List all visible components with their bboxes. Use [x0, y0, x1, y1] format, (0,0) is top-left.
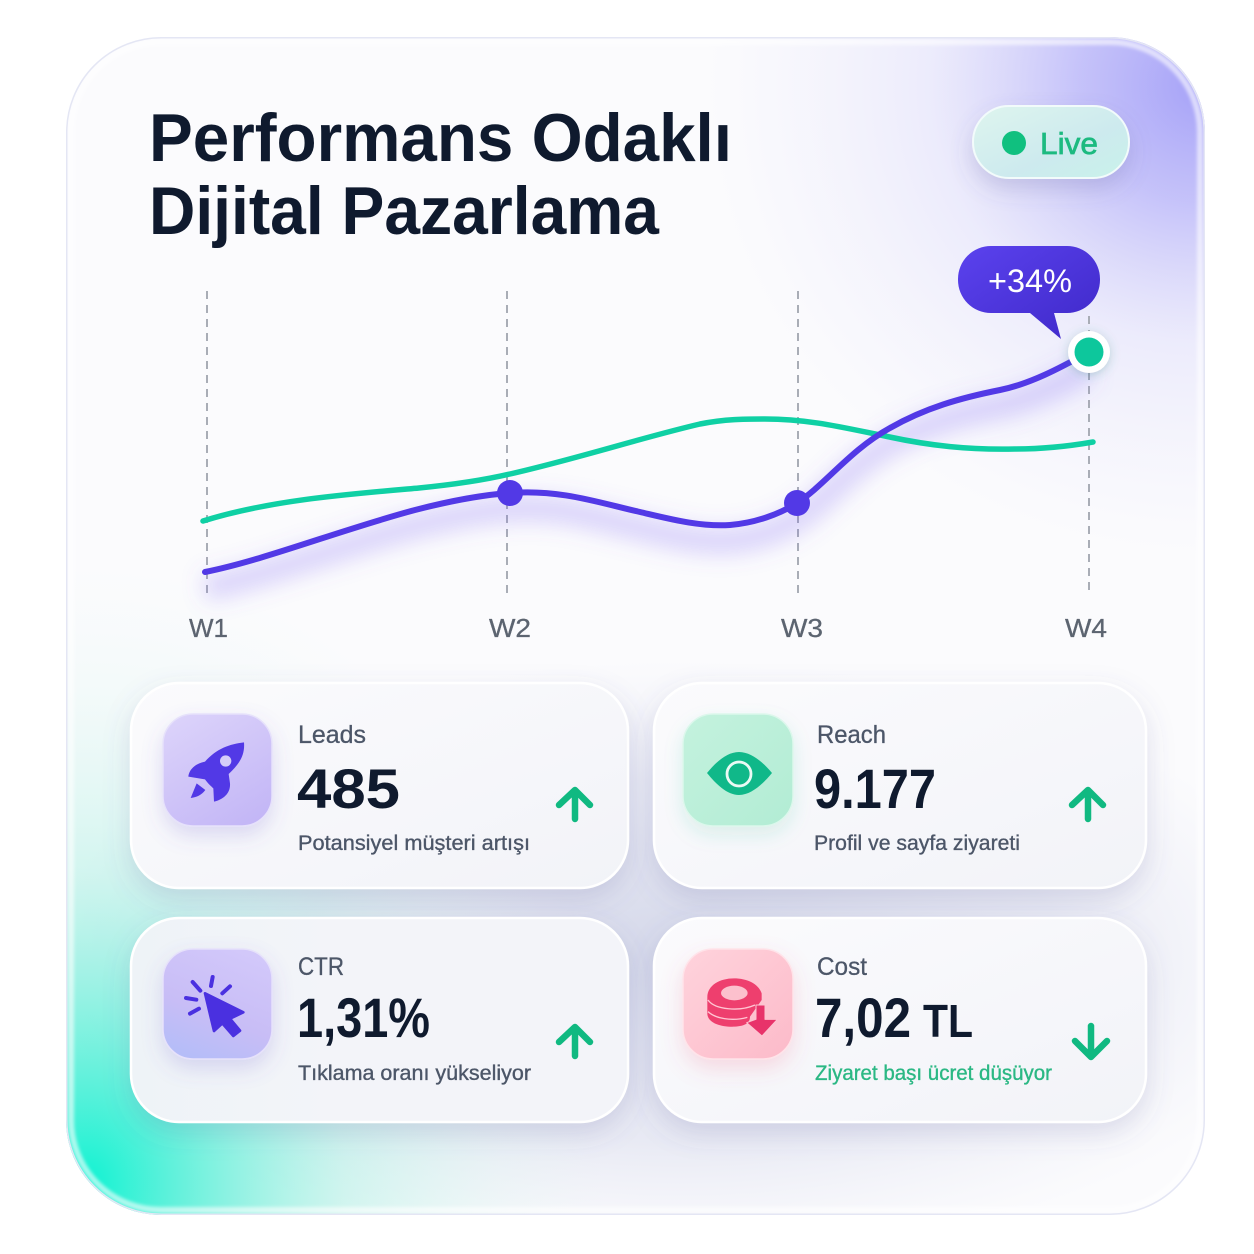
arrow: down — [1075, 1026, 1107, 1057]
arrow: up — [559, 1027, 590, 1056]
live badge — [973, 106, 1129, 178]
live badge: Live — [1040, 126, 1098, 161]
line chart — [189, 291, 1110, 643]
point W2 — [497, 480, 523, 506]
card: Leads: 485 — [297, 757, 400, 820]
card: Leads: Leads — [298, 721, 366, 749]
card: Reach: Profil ve sayfa ziyareti — [814, 832, 1020, 855]
card: Reach — [654, 683, 1146, 888]
week labels: W4 — [1065, 613, 1107, 643]
card: Reach: 9.177 — [814, 757, 936, 820]
card: CTR: Tıklama oranı yükseliyor — [298, 1062, 531, 1085]
card: Cost — [654, 918, 1146, 1122]
title: Performans Odaklı — [149, 100, 732, 176]
callout: +34%: +34% — [988, 263, 1072, 299]
purple line glow — [205, 368, 1089, 588]
week labels: W2 — [489, 613, 531, 643]
title: Dijital Pazarlama — [149, 173, 660, 249]
point W3 — [784, 490, 810, 516]
icon: eye — [683, 714, 793, 826]
icon: coins with down arrow — [683, 949, 793, 1059]
arrow: up — [1072, 790, 1103, 819]
card: CTR: CTR — [298, 953, 344, 981]
week labels: W3 — [781, 613, 823, 643]
card: CTR — [131, 918, 628, 1122]
card: Reach: Reach — [817, 721, 886, 749]
arrow: up — [559, 790, 590, 819]
card: Cost: 7,02 — [815, 986, 911, 1049]
callout: +34% — [958, 246, 1100, 339]
series: green line — [203, 419, 1093, 521]
week labels — [189, 613, 1107, 643]
week grid lines — [207, 291, 1089, 595]
card: Cost: Cost — [817, 953, 867, 981]
card: Leads: Potansiyel müşteri artışı — [298, 832, 530, 855]
week labels: W1 — [189, 613, 228, 643]
card: CTR: 1,31% — [297, 986, 430, 1049]
point W4 — [1068, 331, 1110, 373]
card: Cost: TL — [923, 995, 973, 1047]
icon: rocket — [163, 714, 272, 826]
card: Cost: Ziyaret başı ücret düşüyor — [815, 1062, 1052, 1085]
card: Leads — [131, 683, 628, 888]
series: purple line — [205, 352, 1089, 572]
icon: cursor click — [163, 949, 272, 1059]
title — [149, 100, 732, 249]
